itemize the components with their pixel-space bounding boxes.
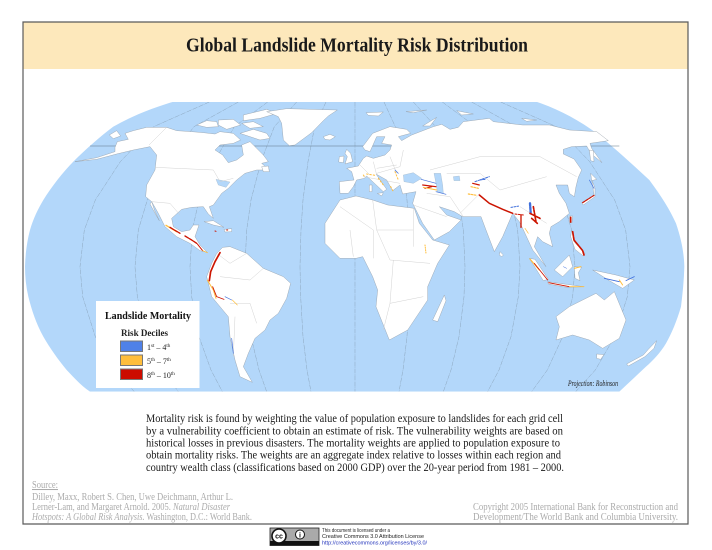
source citation: Lerner-Lam, and Margaret Arnold. 2005. Natural Disaster: [32, 502, 231, 513]
Caribbean islands: [204, 221, 224, 227]
license text: [322, 528, 428, 546]
Arctic islands of Eurasia: [366, 110, 537, 126]
Ethiopia cells: [425, 245, 426, 253]
license text: Creative Commons 3.0 Attribution License: [322, 534, 424, 540]
Creative Commons badge: [270, 528, 319, 546]
legend title: Landslide Mortality: [105, 311, 192, 322]
graticule: [80, 102, 630, 392]
Central Asia cells: [468, 177, 489, 195]
copyright notice: [473, 502, 679, 523]
Sumatra and Java cells: [530, 259, 584, 287]
license text: http://creativecommons.org/licenses/by/3.0/: [322, 540, 428, 546]
description text: country wealth class (classifications based on 2000 GDP) over the 20-year period from 1981 – 2000.: [146, 461, 564, 474]
legend item: 8th to 10th: th: [171, 372, 175, 377]
Andes cells: [207, 253, 237, 353]
Southwest China and Myanmar cells: [511, 203, 540, 233]
Madagascar: [433, 295, 446, 322]
legend item: 8th to 10th: 8: [147, 371, 151, 380]
land masses: [75, 109, 657, 382]
license text: This document is licensed under a: [322, 528, 390, 534]
North America: [75, 127, 269, 252]
legend item: 5th to 7th: 5: [147, 357, 151, 366]
source citation: Dilley, Maxx, Robert S. Chen, Uwe Deichmann, Arthur L.: [32, 492, 233, 503]
Himalaya cells: [479, 195, 513, 213]
description text: [146, 412, 564, 474]
legend item: 1st to 4th: [120, 341, 171, 352]
legend item: 5th to 7th: – 7: [155, 357, 167, 366]
Sulawesi and New Guinea cells: [563, 267, 634, 285]
title band: [23, 22, 688, 69]
description text: obtain mortality risks. The weights are an aggregate index relative to losses within each region and: [146, 448, 561, 462]
Taiwan, Philippines and Japan cells: [571, 180, 594, 255]
legend item: 1st to 4th: st: [151, 344, 155, 349]
British Isles: [345, 149, 353, 164]
source citation: [31, 480, 252, 523]
Australia: [556, 292, 626, 348]
description text: Mortality risk is found by weighting the value of population exposure to landslides for each grid cell: [146, 412, 563, 425]
landslide risk cells: [166, 170, 634, 353]
legend item: 1st to 4th: 1: [147, 343, 151, 352]
projection note: Projection: Robinson: [567, 378, 618, 388]
Creative Commons badge: i: [299, 532, 301, 540]
Greenland: [267, 109, 337, 146]
copyright notice: Copyright 2005 International Bank for Reconstruction and: [473, 502, 679, 513]
legend: [96, 301, 200, 388]
legend item: 8th to 10th: th: [151, 372, 155, 377]
Central America cells: [166, 225, 228, 253]
Iceland: [323, 134, 335, 140]
description text: historical losses in previous disasters. The mortality weights are applied to population exposure to: [146, 436, 560, 450]
description text: by a vulnerability coefficient to obtain an estimate of risk. The vulnerability weights are based on: [146, 424, 563, 438]
legend item: 5th to 7th: [120, 355, 171, 366]
legend item: 8th to 10th: – 10: [155, 371, 171, 380]
Mediterranean and Anatolia cells: [363, 170, 446, 194]
Indonesia, Philippines, Japan: [499, 150, 597, 287]
Creative Commons badge: cc: [275, 534, 283, 540]
Canadian Arctic islands: [109, 109, 277, 172]
source citation: Hotspots: A Global Risk Analysis. Washington, D.C.: World Bank.: [31, 512, 252, 523]
Mediterranean islands: [369, 185, 383, 196]
South America: [207, 247, 291, 382]
world map: [25, 100, 684, 392]
legend subtitle: Risk Deciles: [121, 328, 168, 338]
Tasmania and New Zealand: [597, 341, 657, 366]
inland seas: [216, 173, 460, 193]
Eurasia: [339, 118, 608, 267]
ocean: [25, 100, 684, 392]
Africa: [325, 196, 449, 340]
legend item: 1st to 4th: – 4: [154, 343, 166, 352]
political borders: [149, 127, 577, 357]
legend item: 5th to 7th: th: [167, 358, 171, 363]
legend item: 5th to 7th: th: [151, 358, 155, 363]
legend item: 1st to 4th: th: [166, 344, 171, 349]
Baja California: [150, 202, 159, 221]
source citation: Source:: [32, 480, 58, 491]
New Guinea: [593, 270, 634, 288]
copyright notice: Development/The World Bank and Columbia University.: [473, 512, 678, 523]
title: Global Landslide Mortality Risk Distribution: [186, 34, 528, 56]
legend item: 8th to 10th: [120, 369, 175, 380]
